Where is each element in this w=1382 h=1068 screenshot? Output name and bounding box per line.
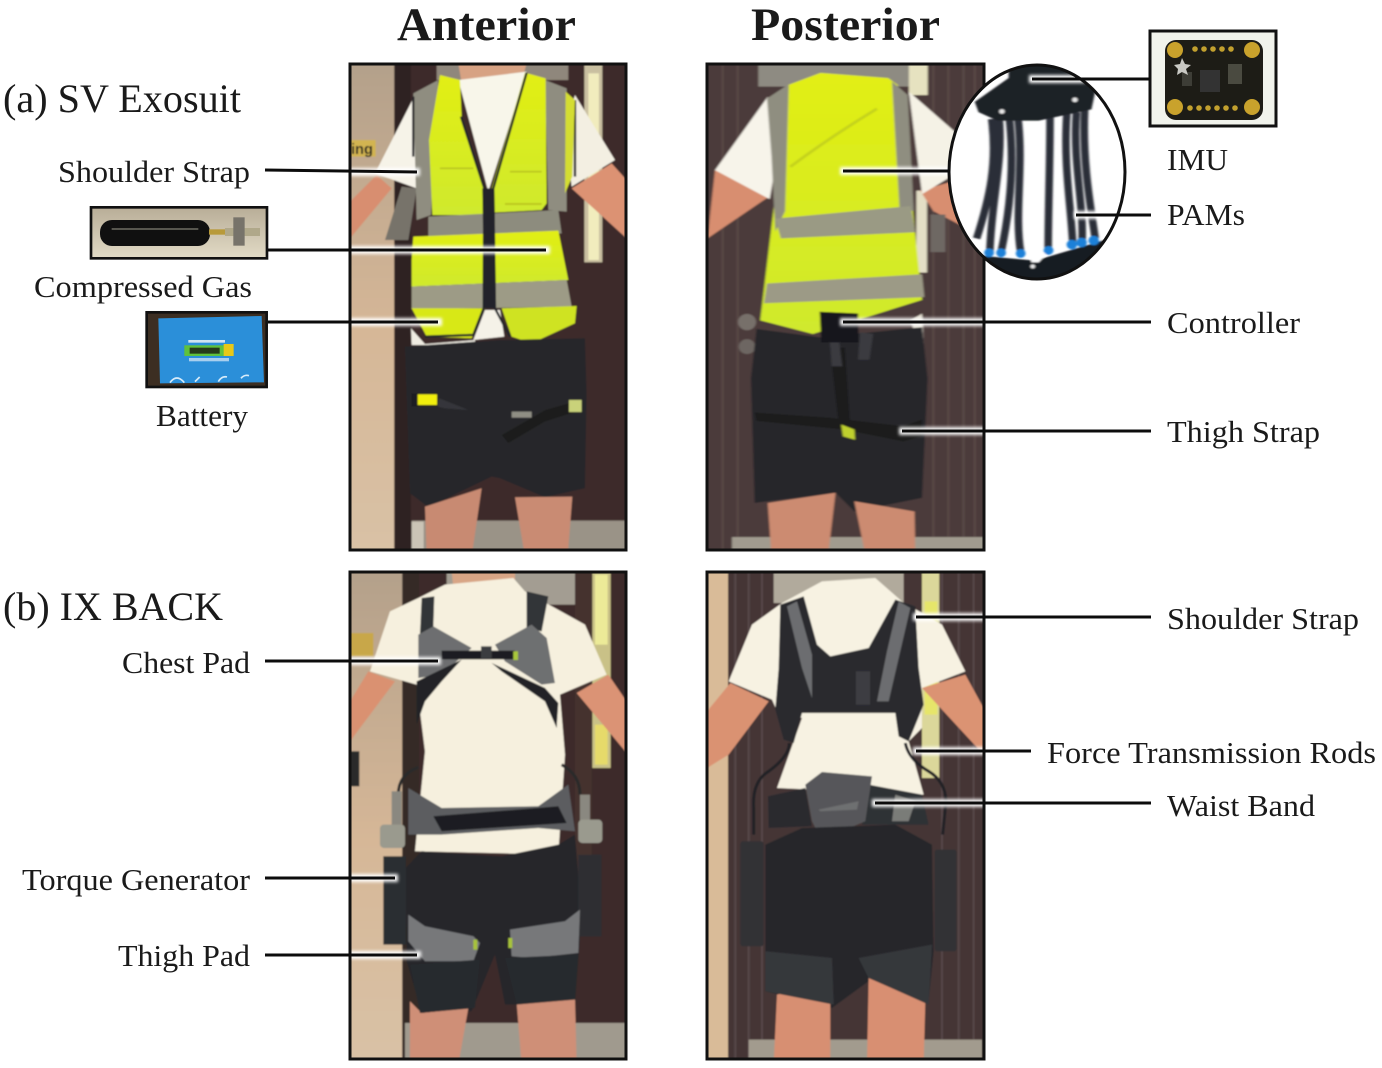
white halo behind lines (340, 172, 550, 322)
white halo behind lines (1029, 79, 1115, 215)
inset: PAMs and IMU mount close-up (949, 61, 1125, 293)
inset: IMU sensor board (1150, 31, 1276, 126)
inset: battery pack (147, 312, 267, 387)
panel: SV Exosuit anterior photo (352, 66, 624, 548)
leader lines (265, 79, 1151, 955)
labels: IX BACK (22, 601, 1376, 973)
white halo behind lines (872, 617, 1000, 803)
labels: SV Exosuit (34, 142, 1320, 449)
white halo behind lines (840, 171, 1000, 431)
heading: (b) IX BACK: (b) IX BACK (3, 584, 223, 629)
labels: SV Exosuit: IMU (1167, 142, 1228, 177)
panel: IX BACK posterior photo (708, 574, 982, 1058)
panel: SV Exosuit anterior frame (350, 64, 626, 550)
panel: IX BACK anterior photo (352, 574, 624, 1058)
labels: SV Exosuit: Battery (156, 398, 248, 433)
labels: SV Exosuit: Thigh Strap (1167, 414, 1320, 449)
labels: IX BACK: Chest Pad (122, 645, 250, 680)
panel: IX BACK anterior frame (350, 572, 626, 1059)
inset: compressed gas cylinder (91, 207, 267, 258)
labels: SV Exosuit: Compressed Gas (34, 269, 252, 304)
labels: IX BACK: Torque Generator (22, 862, 251, 897)
heading: (a) SV Exosuit: (a) SV Exosuit (3, 76, 241, 121)
white halo behind lines (340, 661, 441, 955)
panel: SV Exosuit posterior frame (707, 64, 984, 550)
labels: SV Exosuit: Controller (1167, 305, 1301, 340)
title: Anterior: Anterior (397, 0, 576, 51)
panel: SV Exosuit anterior photo: ing (351, 142, 373, 158)
panel: SV Exosuit posterior photo (708, 66, 982, 548)
title: Posterior: Posterior (751, 0, 940, 51)
labels: SV Exosuit: PAMs (1167, 197, 1245, 232)
panel: IX BACK posterior frame (707, 572, 984, 1059)
labels: IX BACK: Waist Band (1167, 788, 1316, 823)
labels: IX BACK: Shoulder Strap (1167, 601, 1359, 636)
labels: IX BACK: Force Transmission Rods (1047, 735, 1376, 770)
labels: SV Exosuit: Shoulder Strap (58, 154, 250, 189)
labels: IX BACK: Thigh Pad (118, 938, 251, 973)
